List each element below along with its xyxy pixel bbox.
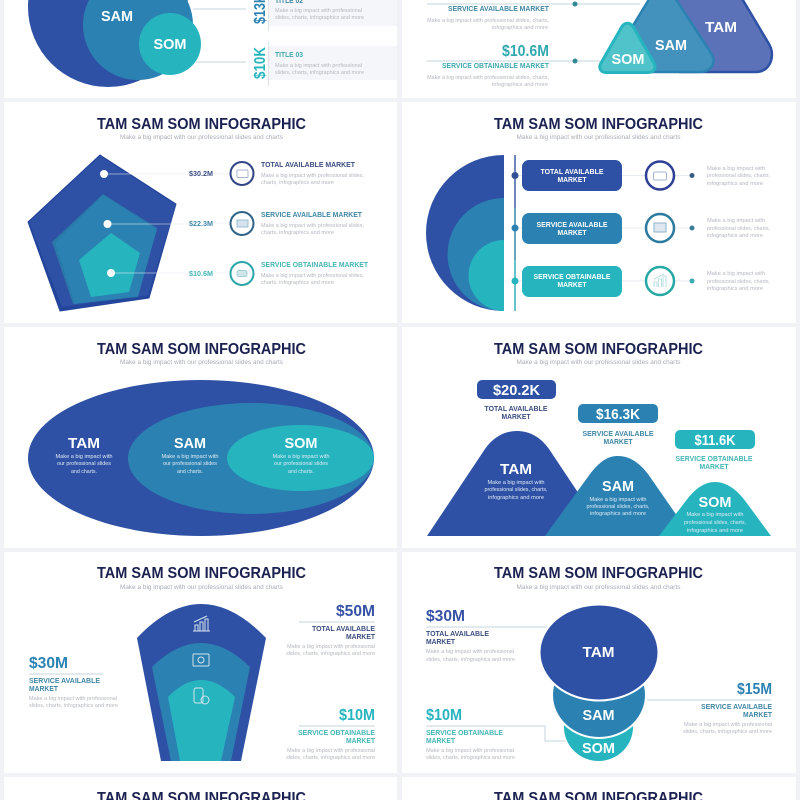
text block 2 <box>707 218 770 239</box>
panel: cropped bottom left <box>4 777 397 800</box>
label: service obtainable market: MARKET <box>700 464 729 471</box>
text box: title 03: TITLE 03 <box>275 52 303 59</box>
box: total available market: MARKET <box>558 177 587 184</box>
mountain: SOM <box>659 482 771 536</box>
text: total available market: Make a big impact with professional <box>287 644 375 650</box>
text block 2: Make a big impact with <box>707 218 765 224</box>
label: total available market: TOTAL AVAILABLE <box>484 406 548 413</box>
panel: rounded triangles <box>402 0 796 98</box>
panel: cropped bottom right <box>402 777 796 800</box>
text block 1 <box>707 166 770 187</box>
text box: title 02 <box>269 0 397 26</box>
mountain: SAM <box>545 456 691 536</box>
text: service available market <box>683 681 773 735</box>
half circle: SOM <box>469 240 504 311</box>
value: $10K rotated: $10K <box>252 47 269 79</box>
text: service obtainable market: SERVICE OBTAINABLE MARKET <box>261 262 369 269</box>
text: service available market: charts, infographics and more <box>261 230 334 236</box>
end dots <box>690 173 694 284</box>
text: TAM <box>56 435 113 475</box>
icon: wallet <box>646 162 674 190</box>
icon: banknote <box>646 214 674 242</box>
icon: coins <box>230 262 254 285</box>
panel: pentagon <box>4 102 397 323</box>
box: service obtainable market: MARKET <box>558 282 587 289</box>
value pill: $11.6K: $11.6K <box>694 432 736 449</box>
subtitle: Make a big impact with our professional slides and charts <box>120 360 283 366</box>
value pill: $16.3K: $16.3K <box>596 406 640 423</box>
text: service obtainable market: slides, charts, infographics and more <box>426 755 515 761</box>
text: TAM: infographics and more <box>488 495 544 501</box>
text block 2: professional slides, charts, <box>707 226 770 232</box>
text: SAM: Make a big impact with <box>590 497 647 503</box>
text block 1: professional slides, charts, <box>707 173 770 179</box>
label: SOM: SOM <box>154 36 186 53</box>
heading: TAM SAM SOM INFOGRAPHIC <box>494 116 703 133</box>
text block 3 <box>707 271 770 292</box>
text: service obtainable market: Make a big impact with professional slides, <box>261 273 365 279</box>
text: service available market: Make a big impact with professional slides, <box>261 223 365 229</box>
triangle: SAM <box>612 0 714 72</box>
text box: title 02: Make a big impact with professional <box>275 8 362 14</box>
box: total available market <box>522 160 622 191</box>
text: TAM <box>484 461 548 501</box>
text: total available market: MARKET <box>346 634 376 641</box>
panel: stacked ellipses <box>402 552 796 773</box>
text: service obtainable market: Make a big impact with professional <box>426 748 514 754</box>
text box: title 03: Make a big impact with professional <box>275 63 362 69</box>
text: service available market: SERVICE AVAILABLE MARKET <box>448 6 550 13</box>
text: total available market: $50M <box>336 603 375 620</box>
label: total available market <box>484 406 548 421</box>
subtitle: Make a big impact with our professional slides and charts <box>516 135 680 141</box>
value: $10.6M: $10.6M <box>502 43 549 60</box>
fan: TAM <box>137 604 266 761</box>
connector lines <box>427 4 640 61</box>
text block 2: infographics and more <box>707 233 763 239</box>
value pill: $16.3K <box>578 404 658 423</box>
text: service available market: SERVICE AVAILABLE MARKET <box>261 212 363 219</box>
pentagon: TAM <box>28 155 176 311</box>
text: TAM: our professional slides <box>57 461 111 467</box>
text: total available market <box>426 608 515 663</box>
text: total available market: charts, infographics and more <box>261 180 334 186</box>
box: service available market <box>522 213 622 244</box>
label: TAM: TAM <box>705 19 737 36</box>
text: total available market: TOTAL AVAILABLE MARKET <box>261 162 356 169</box>
text: service obtainable market: MARKET <box>346 738 376 745</box>
text: SAM: our professional slides <box>163 461 217 467</box>
label: total available market: MARKET <box>502 414 531 421</box>
panel: overlapping circles <box>4 0 397 98</box>
label: service obtainable market <box>676 456 753 471</box>
text: service available market: Make a big impact with professional <box>684 722 772 728</box>
text: service obtainable market <box>261 262 369 286</box>
fan: SAM <box>152 643 250 761</box>
connector dots <box>573 2 578 63</box>
text: SOM: our professional slides <box>274 461 328 467</box>
timeline with dots <box>512 155 692 311</box>
text: SAM: professional slides, charts, <box>586 504 650 510</box>
circle: SOM <box>139 13 201 75</box>
text: service available market: MARKET <box>743 712 773 719</box>
text: total available market <box>261 162 365 186</box>
ellipse: TAM <box>540 604 658 700</box>
triangle: SOM <box>600 23 655 72</box>
text: service obtainable market: Make a big impact with professional slides, charts, <box>427 75 549 81</box>
text: total available market: Make a big impact with professional slides, <box>261 173 365 179</box>
text block 3: professional slides, charts, <box>707 279 770 285</box>
text: SOM: SOM <box>698 494 732 511</box>
box: service available market: SERVICE AVAILABLE <box>536 222 608 229</box>
circle: TAM <box>28 0 188 87</box>
heading: TAM SAM SOM INFOGRAPHIC <box>97 341 306 358</box>
marker dots and leader lines <box>100 170 228 277</box>
label: SAM: SAM <box>655 37 687 54</box>
heading: TAM SAM SOM INFOGRAPHIC <box>494 341 703 358</box>
value: $10.6M: $10.6M <box>189 271 213 278</box>
text: SOM: and charts. <box>288 469 314 475</box>
text: total available market: TOTAL AVAILABLE <box>426 631 489 638</box>
text: SOM: Make a big impact with <box>686 512 744 518</box>
text: SOM: SOM <box>284 435 318 452</box>
text: TAM: TAM <box>68 435 100 452</box>
text box: title 02: slides, charts, infographics and more <box>275 15 364 21</box>
text: service available market: Make a big impact with professional <box>29 696 117 702</box>
text: service available market: SERVICE AVAILABLE <box>701 704 772 711</box>
text: service obtainable market: Make a big impact with professional <box>287 748 375 754</box>
text: SAM: and charts. <box>177 469 203 475</box>
text: service obtainable market <box>286 707 376 761</box>
text: service available market: $30M <box>29 655 68 672</box>
label: SOM: SOM <box>582 740 615 757</box>
text: SAM <box>162 435 219 475</box>
label: service available market: SERVICE AVAILABLE <box>582 431 654 438</box>
icon: wallet <box>230 162 254 185</box>
text: TAM: TAM <box>500 461 532 478</box>
text: SAM: SAM <box>174 435 206 452</box>
subtitle: Make a big impact with our professional slides and charts <box>516 585 680 591</box>
text: service available market <box>427 6 550 31</box>
panel: nested ellipses <box>4 327 397 548</box>
ellipse: SOM <box>227 425 374 491</box>
text: total available market: MARKET <box>426 639 456 646</box>
ellipse: TAM <box>28 380 374 536</box>
label: TAM: TAM <box>582 644 614 661</box>
text: total available market: slides, charts, infographics and more <box>286 651 375 657</box>
text: total available market: TOTAL AVAILABLE <box>312 626 375 633</box>
text block 1: infographics and more <box>707 181 763 187</box>
value: $22.3M: $22.3M <box>189 221 213 228</box>
value: $30.2M: $30.2M <box>189 171 213 178</box>
subtitle: Make a big impact with our professional slides and charts <box>120 585 283 591</box>
text: total available market: Make a big impact with professional <box>426 649 514 655</box>
text: service available market <box>261 212 365 236</box>
panel: fan shape <box>4 552 397 773</box>
half circle: SAM <box>448 198 504 311</box>
text: SOM: Make a big impact with <box>272 454 330 460</box>
text box: title 03 <box>269 46 397 80</box>
mountain: TAM <box>427 431 607 536</box>
icon: bar chart <box>193 616 210 631</box>
value pill: $20.2K <box>477 380 556 399</box>
text: service obtainable market: $10M <box>426 707 462 724</box>
text: service obtainable market: charts, infographics and more <box>261 280 334 286</box>
panel: half circles <box>402 102 796 323</box>
text: SAM: SAM <box>602 478 634 495</box>
subtitle: Make a big impact with our professional slides and charts <box>516 360 680 366</box>
box: service obtainable market <box>522 266 622 297</box>
label: SAM: SAM <box>582 707 614 724</box>
text: service available market: $15M <box>737 681 772 698</box>
icon: banknote <box>230 212 254 235</box>
label: service available market <box>582 431 654 446</box>
text: service obtainable market: $10M <box>339 707 375 724</box>
text box: title 03: slides, charts, infographics and more <box>275 70 364 76</box>
text: service available market <box>29 655 118 709</box>
pentagon: SOM <box>79 233 140 297</box>
text: service obtainable market <box>426 707 515 761</box>
ellipse: SAM <box>552 652 646 738</box>
text: service available market: Make a big impact with professional slides, charts, <box>427 18 549 24</box>
circle: SAM <box>83 0 193 80</box>
text: SOM <box>684 494 746 534</box>
ellipse: SAM <box>128 403 374 514</box>
heading: TAM SAM SOM INFOGRAPHIC <box>494 565 703 582</box>
heading: TAM SAM SOM INFOGRAPHIC <box>97 116 306 133</box>
text: total available market <box>286 603 376 657</box>
box: service obtainable market: SERVICE OBTAINABLE <box>534 274 611 281</box>
text: service obtainable market: MARKET <box>426 738 456 745</box>
label: service obtainable market: SERVICE OBTAINABLE <box>676 456 753 463</box>
text: service obtainable market: infographics and more <box>492 82 548 88</box>
half circle: TAM <box>426 155 504 311</box>
text: total available market: $30M <box>426 608 465 625</box>
box: service available market: MARKET <box>558 230 587 237</box>
text: TAM: Make a big impact with <box>56 454 113 460</box>
text block 3: Make a big impact with <box>707 271 765 277</box>
text: SAM: Make a big impact with <box>162 454 219 460</box>
text: service obtainable market: SERVICE OBTAINABLE MARKET <box>442 63 550 70</box>
icon: banknote <box>193 654 209 666</box>
panel: mountains <box>402 327 796 548</box>
connector lines <box>426 627 771 741</box>
text: SAM <box>586 478 650 517</box>
value pill: $20.2K: $20.2K <box>493 382 540 399</box>
icon: chart <box>646 267 674 295</box>
triangle: TAM <box>650 0 772 72</box>
label: service available market: MARKET <box>604 439 633 446</box>
value pill: $11.6K <box>675 430 755 449</box>
connector lines <box>193 9 246 62</box>
pentagon: SAM <box>52 194 157 304</box>
text: TAM: Make a big impact with <box>488 480 545 486</box>
fan: SOM <box>168 680 235 761</box>
text: SOM <box>272 435 330 475</box>
icon: coins <box>194 688 209 704</box>
box: total available market: TOTAL AVAILABLE <box>540 169 604 176</box>
text: TAM: professional slides, charts, <box>484 487 548 493</box>
text: service available market: infographics and more <box>492 25 548 31</box>
text: total available market: slides, charts, infographics and more <box>426 657 515 663</box>
text: SOM: infographics and more <box>687 528 743 534</box>
label: SOM: SOM <box>612 51 644 68</box>
label: SAM: SAM <box>101 8 133 25</box>
subtitle: Make a big impact with our professional slides and charts <box>120 135 283 141</box>
text: TAM: and charts. <box>71 469 97 475</box>
text block 1: Make a big impact with <box>707 166 765 172</box>
text: service obtainable market: slides, charts, infographics and more <box>286 755 375 761</box>
text: service available market: SERVICE AVAILABLE <box>29 678 100 685</box>
divider lines <box>268 0 270 86</box>
heading: TAM SAM SOM INFOGRAPHIC <box>97 565 306 582</box>
ellipse: SOM <box>564 693 633 761</box>
text: service obtainable market: SERVICE OBTAINABLE <box>426 730 503 737</box>
text: service available market: slides, charts, infographics and more <box>683 729 772 735</box>
text: service obtainable market: SERVICE OBTAINABLE <box>298 730 375 737</box>
text: service available market: MARKET <box>29 686 59 693</box>
text: SAM: infographics and more <box>590 511 646 517</box>
text: service available market: slides, charts, infographics and more <box>29 703 118 709</box>
text block 3: infographics and more <box>707 286 763 292</box>
text: SOM: professional slides, charts, <box>684 520 746 526</box>
text: service obtainable market <box>427 63 550 88</box>
